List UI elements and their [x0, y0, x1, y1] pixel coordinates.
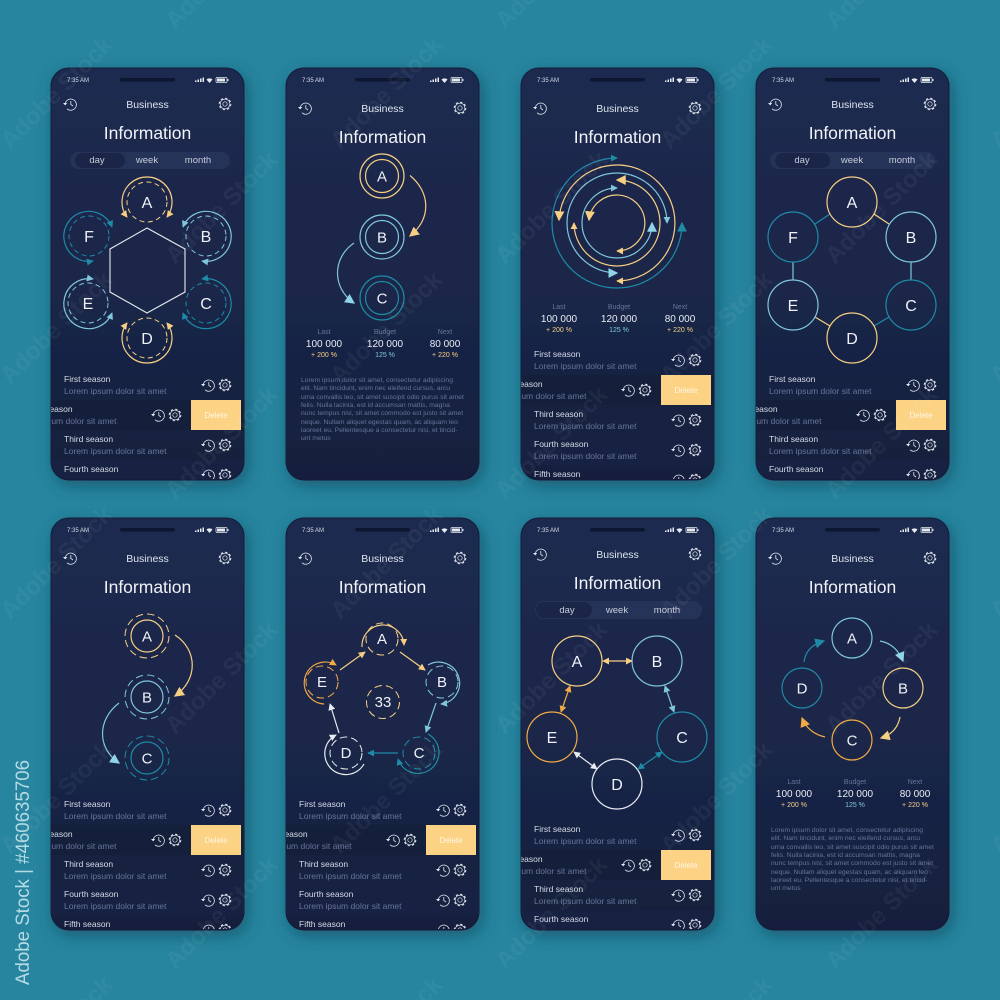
arrow B to C — [338, 243, 354, 303]
phone 3 list: Delete — [674, 386, 698, 395]
phone 8 body text — [771, 827, 934, 892]
node D: D — [797, 680, 808, 698]
node A — [125, 614, 169, 658]
node D: D — [141, 331, 153, 348]
phone 4 list — [756, 376, 949, 479]
phone 2 header — [298, 78, 466, 147]
node D: D — [341, 745, 352, 762]
phone 8 stats — [776, 779, 931, 809]
phone 7 tabs — [535, 601, 702, 619]
node A — [360, 154, 404, 198]
phone 8 stats: 80 000 — [900, 789, 931, 800]
phone 8 stats: + 220 % — [902, 802, 928, 809]
node E — [64, 279, 112, 329]
arrow B to C — [102, 703, 119, 763]
phone 7 list: Third season — [534, 884, 583, 894]
node E: E — [547, 730, 557, 747]
phone 2 body text: laoreet eu. Pellentesque a consectetur nisi, et tincid- — [301, 427, 457, 434]
phone 8 body text: unt metus — [771, 885, 801, 892]
phone 6 list: Third season — [299, 859, 348, 869]
phone 4 list: Second season — [719, 404, 778, 414]
phone 6 list: Second season — [249, 829, 308, 839]
phone 5 header: Information — [104, 577, 191, 597]
node B — [632, 636, 682, 686]
phone 4 header: Information — [809, 123, 896, 143]
phone 5 list: Second season — [14, 829, 73, 839]
phone 1 tabs — [70, 152, 230, 169]
node C: C — [676, 730, 688, 747]
node C — [657, 712, 707, 762]
phone 7 list: Lorem ipsum dolor sit amet — [534, 896, 637, 906]
node B — [360, 215, 404, 259]
phone 6 list: First season — [299, 799, 346, 809]
centre value — [366, 686, 400, 718]
node C — [125, 736, 169, 780]
phone 1 list: Lorem ipsum dolor sit amet — [64, 446, 167, 456]
phone 8 header: Business — [831, 553, 874, 565]
node B — [125, 675, 169, 719]
phone 7 list — [521, 826, 714, 929]
phone 6 list: Lorem ipsum dolor sit amet — [249, 841, 352, 851]
phone 6 list: Lorem ipsum dolor sit amet — [299, 811, 402, 821]
phone 8 body text: urna convallis leo, sit amet suscipit odio purus sit amet — [771, 844, 934, 851]
phone 8 body text: neque. Nullam aliquet egestas quam, ac aliquam leo — [771, 869, 928, 876]
phone 1 list: First season — [64, 374, 111, 384]
phone 8 body text: elit. Nam tincidunt, enim nec eleifend cursus, arcu — [771, 835, 920, 842]
node F — [64, 211, 112, 261]
node B — [426, 662, 460, 704]
phone 8 stats: Budget — [844, 779, 866, 786]
phone 5 list: Fifth season — [64, 919, 111, 929]
phone 6 list: Lorem ipsum dolor sit amet — [299, 901, 402, 911]
phone 5 list: Fourth season — [64, 889, 119, 899]
node D: D — [611, 777, 623, 794]
phone body — [286, 518, 479, 930]
node A: A — [847, 195, 858, 212]
phone 4 header: 7:35 AM — [772, 78, 794, 84]
phone 2 body text: urna convallis leo, sit amet suscipit odio purus sit amet — [301, 394, 464, 401]
phone 7: pentagon with double arrows — [484, 518, 714, 940]
phone 2 stats: + 200 % — [311, 352, 337, 359]
phone 8 header — [768, 528, 936, 597]
phone body — [51, 68, 244, 480]
double arrows — [561, 661, 674, 769]
phone 1 list: Lorem ipsum dolor sit amet — [64, 386, 167, 396]
phone 7 list: Second season — [484, 854, 543, 864]
phone 4 tabs — [770, 152, 935, 169]
phone 5: three dashed nodes — [14, 518, 244, 936]
phone 2 body text: neque. Nullam aliquet egestas quam, ac aliquam leo — [301, 419, 458, 426]
phone 4 list: Delete — [909, 411, 933, 420]
connector lines — [793, 214, 911, 326]
node C: C — [200, 296, 212, 313]
spiral chart — [552, 158, 682, 288]
node D — [122, 318, 172, 363]
phone 1 header: Business — [126, 99, 169, 111]
phone 7 header: Business — [596, 549, 639, 561]
phone 1 list: Lorem ipsum dolor sit amet — [14, 416, 117, 426]
phone 2 body text: unt metus — [301, 435, 331, 442]
node A: A — [142, 628, 152, 646]
phone 7 tabs: day — [559, 605, 575, 616]
phone 6 list — [286, 801, 479, 929]
phone 6: pentagon cycle with centre value — [249, 518, 479, 936]
phone 3 stats: + 200 % — [546, 327, 572, 334]
phone 2 header: 7:35 AM — [302, 78, 324, 84]
phone 7 list: First season — [534, 824, 581, 834]
phone 5 list: Lorem ipsum dolor sit amet — [64, 871, 167, 881]
phone body — [286, 68, 479, 480]
node C — [360, 276, 404, 320]
phone 2 stats: 125 % — [375, 352, 395, 359]
phone 8 body text: felis. Nulla lacinia, est id accumsan mattis, magna — [771, 852, 920, 859]
phone 3 list: Lorem ipsum dolor sit amet — [484, 391, 587, 401]
phone 1 list: Delete — [204, 411, 228, 420]
phone 5 list: First season — [64, 799, 111, 809]
node D — [827, 313, 877, 363]
phone 3 stats: Next — [673, 304, 687, 311]
phone 8 body text: nunc tempus nisl, sit amet commodo est justo sit amet — [771, 860, 933, 867]
phone 5 header — [63, 528, 231, 597]
phone 3 list: Second season — [484, 379, 543, 389]
phone 7 tabs: week — [605, 605, 628, 616]
phone 6 list: Lorem ipsum dolor sit amet — [299, 871, 402, 881]
phone 7 header — [533, 528, 701, 593]
node A — [832, 618, 872, 658]
stock id label: Adobe Stock | #460635706 — [13, 760, 34, 985]
node C — [832, 720, 872, 760]
node E — [768, 280, 818, 330]
node C — [886, 280, 936, 330]
node C — [183, 279, 231, 329]
phone 1 list: Fourth season — [64, 464, 119, 474]
phone 3 list: Fourth season — [534, 439, 589, 449]
phone 7 tabs: month — [654, 605, 680, 616]
phone 7 list: Lorem ipsum dolor sit amet — [484, 866, 587, 876]
phone 3 stats: 125 % — [609, 327, 629, 334]
phone 5 list: Lorem ipsum dolor sit amet — [64, 901, 167, 911]
phone 2 stats — [306, 329, 461, 359]
node B — [883, 668, 923, 708]
hexagon — [110, 228, 185, 313]
phone 4 list: Lorem ipsum dolor sit amet — [769, 446, 872, 456]
phone 3 list — [521, 351, 714, 479]
phone 8 body text: laoreet eu. Pellentesque a consectetur nisi, et tincid- — [771, 877, 927, 884]
node B: B — [652, 654, 662, 671]
phone 2 stats: Next — [438, 329, 452, 336]
node B: B — [437, 674, 447, 691]
phone 4 tabs: day — [794, 155, 810, 166]
centre value: 33 — [375, 694, 391, 711]
node E: E — [788, 298, 798, 315]
phone 1 header: 7:35 AM — [67, 78, 89, 84]
node E: E — [83, 296, 93, 313]
phone 3 list: First season — [534, 349, 581, 359]
phone 2 stats: Last — [317, 329, 331, 336]
phone 3 stats: 80 000 — [665, 314, 696, 325]
node B: B — [906, 230, 916, 247]
phone 3 header: Information — [574, 127, 661, 147]
phone body — [521, 518, 714, 930]
phone 5 list: Delete — [204, 836, 228, 845]
phone 6 header — [298, 528, 466, 597]
arrow A to B — [410, 176, 426, 236]
node A — [827, 177, 877, 227]
phone 6 list: Fourth season — [299, 889, 354, 899]
phone body — [756, 518, 949, 930]
phone 3 header: 7:35 AM — [537, 78, 559, 84]
phone 3 header: Business — [596, 103, 639, 115]
phone 8 body text: Lorem ipsum dolor sit amet, consectetur adipiscing — [771, 827, 923, 834]
phone 2 stats: 120 000 — [367, 339, 404, 350]
phone 4 tabs: month — [889, 155, 915, 166]
phone body — [51, 518, 244, 930]
phone 4 header — [768, 78, 936, 143]
node F: F — [788, 230, 798, 247]
phone 6 list: Fifth season — [299, 919, 346, 929]
phone 3 list: Fifth season — [534, 469, 581, 479]
node B — [886, 212, 936, 262]
phone 4 list: Lorem ipsum dolor sit amet — [719, 416, 822, 426]
phone 1 tabs: day — [89, 155, 105, 166]
node B — [183, 211, 231, 261]
phone 5 list: Third season — [64, 859, 113, 869]
node B: B — [898, 680, 908, 698]
phone 2 stats: Budget — [374, 329, 396, 336]
phone 2 body text: Lorem ipsum dolor sit amet, consectetur adipiscing — [301, 377, 453, 384]
cycle arrows — [802, 641, 903, 738]
phone 2 stats: + 220 % — [432, 352, 458, 359]
phone 5 list: Lorem ipsum dolor sit amet — [14, 841, 117, 851]
phone 3 stats: + 220 % — [667, 327, 693, 334]
phone 3 stats: Last — [552, 304, 566, 311]
phone 8: four node cycle with stats — [756, 518, 949, 930]
phone 8 stats: 125 % — [845, 802, 865, 809]
phone 4 list: Third season — [769, 434, 818, 444]
phone 4 list: Lorem ipsum dolor sit amet — [769, 386, 872, 396]
phone 3 list: Lorem ipsum dolor sit amet — [534, 451, 637, 461]
arrow A to B — [175, 635, 192, 696]
phone 4: connected hexagon of circles — [719, 68, 949, 490]
phone 3 stats: 100 000 — [541, 314, 578, 325]
phone 8 stats: + 200 % — [781, 802, 807, 809]
phone 3 header — [533, 78, 701, 147]
phone 2: three nodes with stats — [286, 68, 479, 480]
node A: A — [377, 168, 387, 186]
node F: F — [84, 229, 94, 246]
phone 5 header: 7:35 AM — [67, 528, 89, 534]
node A: A — [847, 630, 857, 648]
phone 1 list: Second season — [14, 404, 73, 414]
phone 3 list: Third season — [534, 409, 583, 419]
node E — [527, 712, 577, 762]
node C: C — [142, 750, 153, 768]
phone 7 list: Delete — [674, 861, 698, 870]
node D — [782, 668, 822, 708]
phone 8 stats: 100 000 — [776, 789, 813, 800]
node A: A — [142, 195, 153, 212]
node A — [552, 636, 602, 686]
phone 8 header: Information — [809, 577, 896, 597]
phone 8 stats: Next — [908, 779, 922, 786]
cycle arrows — [330, 652, 436, 753]
node F — [768, 212, 818, 262]
phone 2 body text: felis. Nulla lacinia, est id accumsan mattis, magna — [301, 402, 450, 409]
phone 2 body text: elit. Nam tincidunt, enim nec eleifend cursus, arcu — [301, 385, 450, 392]
phone 6 header: Business — [361, 553, 404, 565]
phone body — [521, 68, 714, 480]
phone 5 header: Business — [126, 553, 169, 565]
phone 5 list: Lorem ipsum dolor sit amet — [64, 811, 167, 821]
phone 7 header: 7:35 AM — [537, 528, 559, 534]
phone 1 header — [63, 78, 231, 143]
phone 2 body text: nunc tempus nisl, sit amet commodo est justo sit amet — [301, 410, 463, 417]
phone 1 tabs: week — [135, 155, 158, 166]
phone 3 list: Lorem ipsum dolor sit amet — [534, 421, 637, 431]
phone body — [756, 68, 949, 480]
node C: C — [905, 298, 917, 315]
node C: C — [377, 290, 388, 308]
node B: B — [377, 230, 387, 246]
node C: C — [414, 745, 425, 762]
phone 2 header: Information — [339, 127, 426, 147]
phone 4 list: Fourth season — [769, 464, 824, 474]
node A — [362, 623, 404, 655]
phone 1 list: Third season — [64, 434, 113, 444]
node A: A — [572, 654, 583, 671]
phone 7 list: Lorem ipsum dolor sit amet — [534, 836, 637, 846]
phone 1 list — [51, 376, 244, 479]
node C: C — [847, 732, 858, 750]
phone 3: concentric spiral — [484, 68, 714, 486]
phone 8 stats: 120 000 — [837, 789, 874, 800]
node B: B — [201, 229, 211, 246]
phone 3 stats — [541, 304, 696, 334]
node A — [122, 177, 172, 222]
phone 7 header: Information — [574, 573, 661, 593]
node D — [325, 735, 364, 775]
phone 4 list: First season — [769, 374, 816, 384]
phone 4 header: Business — [831, 99, 874, 111]
phone 6 header: Information — [339, 577, 426, 597]
phone 2 stats: 100 000 — [306, 339, 343, 350]
node C — [398, 734, 439, 773]
phone 3 stats: Budget — [608, 304, 630, 311]
node A: A — [377, 631, 387, 648]
phone 5 list — [51, 801, 244, 929]
phone 3 list: Lorem ipsum dolor sit amet — [534, 361, 637, 371]
phone 2 header: Business — [361, 103, 404, 115]
phone 6 header: 7:35 AM — [302, 528, 324, 534]
phone 2 body text — [301, 377, 464, 442]
phone 2 stats: 80 000 — [430, 339, 461, 350]
phone 4 tabs: week — [840, 155, 863, 166]
node D — [592, 759, 642, 809]
node E — [304, 662, 338, 704]
phone 1 tabs: month — [185, 155, 211, 166]
phone 1 header: Information — [104, 123, 191, 143]
node B: B — [142, 690, 152, 706]
node E: E — [317, 674, 327, 691]
phone 8 header: 7:35 AM — [772, 528, 794, 534]
node D: D — [846, 331, 858, 348]
phone 6 list: Delete — [439, 836, 463, 845]
phone 1: hexagon diagram — [14, 68, 244, 490]
phone 3 stats: 120 000 — [601, 314, 638, 325]
phone 8 stats: Last — [787, 779, 801, 786]
phone 7 list: Fourth season — [534, 914, 589, 924]
